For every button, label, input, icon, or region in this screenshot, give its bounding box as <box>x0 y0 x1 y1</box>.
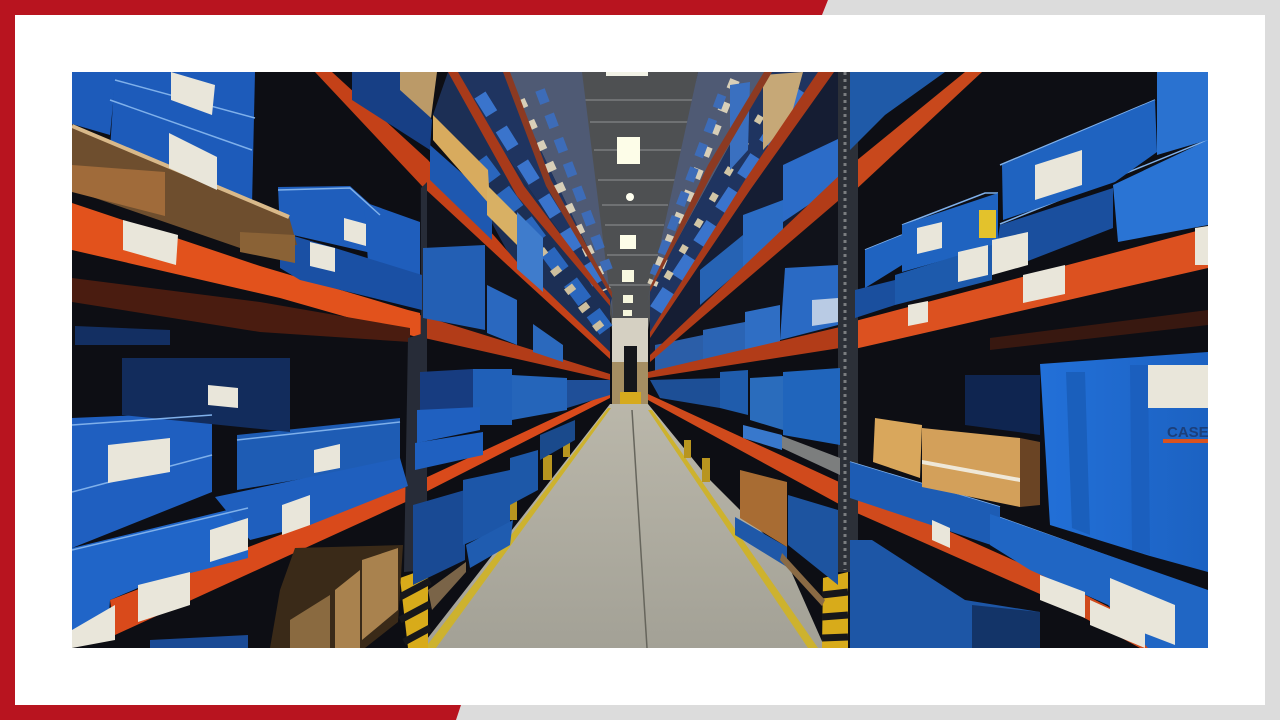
left orange beams <box>72 72 612 635</box>
right orange beams <box>648 72 1208 648</box>
"CASE" crate logo: CASE <box>1167 424 1209 441</box>
shipping labels <box>72 72 1208 648</box>
right cardboard boxes and wooden crate <box>740 418 1040 606</box>
hazard-striped pillar guards <box>398 437 848 648</box>
crate rim highlights <box>72 80 1208 592</box>
"CASE" crate logo <box>1163 427 1208 443</box>
floor with yellow lines <box>420 404 825 648</box>
ceiling and far end of aisle <box>580 72 698 411</box>
left wooden pallet and crates <box>72 72 517 648</box>
steel uprights <box>404 72 858 572</box>
left blue crates <box>72 72 610 648</box>
warehouse aisle photo <box>72 72 1209 648</box>
left far shelf rows <box>433 72 613 359</box>
right far shelf rows <box>647 72 840 375</box>
right blue crates <box>650 72 1208 648</box>
